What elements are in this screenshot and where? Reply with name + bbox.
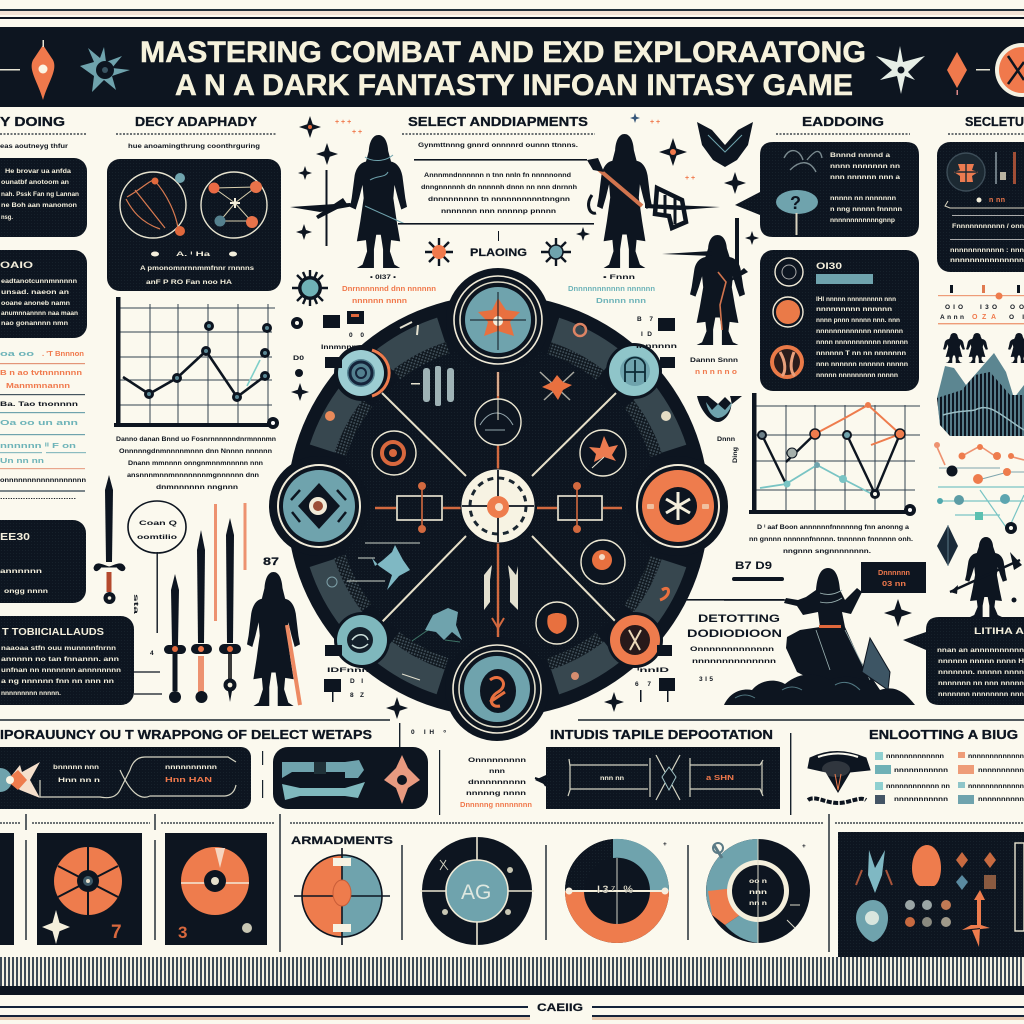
panel: bottom right callout: nnnnnnn nnnnnnnn nnn xyxy=(938,691,1024,698)
section headings row: DECY ADAPHADY xyxy=(135,114,257,129)
small icon: teal griffin xyxy=(347,543,420,590)
text block: center comparison note: nnn xyxy=(489,768,505,775)
node: top-right mask xyxy=(606,343,662,399)
panel: stat rows: OI30 xyxy=(816,261,842,271)
icon: dark diamond xyxy=(937,525,958,566)
panel: item collection bottom right xyxy=(838,832,1024,957)
panel: stat rows: nnnnnnnnn nnnnnn xyxy=(816,306,892,313)
icon: map pin xyxy=(0,40,54,100)
small labels right of wheel: n n n n n o xyxy=(695,369,737,376)
chart: mountain area xyxy=(937,353,1024,436)
heading: phasing with sun icons xyxy=(425,238,571,266)
text block: center comparison note: nnnnng nnnn xyxy=(466,790,526,797)
figure: warrior far right with spear xyxy=(950,537,1022,617)
panel: orange wheel tile one xyxy=(37,833,142,945)
legend strip right: OZA xyxy=(972,314,996,321)
section headings row: SELECT ANDDIAPMENTS xyxy=(408,114,588,129)
small labels right of wheel: • Fnnn xyxy=(603,274,635,281)
small labels left of wheel: nnnnnn nnnn xyxy=(352,298,407,305)
item: orange capsule xyxy=(912,845,941,886)
legend: encounter mask and swatches: nnnnnnnnnnn xyxy=(894,796,948,803)
rocks xyxy=(724,674,915,705)
weapon: polearm xyxy=(290,170,354,246)
panel: doing text xyxy=(0,250,87,338)
text block: chart caption left xyxy=(116,436,276,491)
vertical rules lower xyxy=(262,723,791,815)
panel: technical notes: naaoaa stfn ouu munnnnfnrnn xyxy=(1,645,116,652)
heading: detecting: Onnnnnnnnnnnnn xyxy=(690,646,774,653)
small icon: twin blades xyxy=(484,565,518,628)
text block: coloured left column: B n ao tvtnnnnnnn xyxy=(0,370,82,377)
label box: kneeling warrior xyxy=(861,562,926,593)
text block: coloured left column: . 'T Bnnnon xyxy=(42,351,84,358)
panel: bottom right callout: nnan an annnnnnnnnn xyxy=(937,647,1024,654)
panel: encounter callout: nnnnn nn nnnnnnn xyxy=(830,195,896,202)
icon: bat emblem xyxy=(697,122,753,167)
panel: stat rows: nnnnnnnnnnnnn nnnnnnn xyxy=(816,328,903,335)
bottom section headings: 0 IH ᵒ xyxy=(411,729,446,736)
small icon: orange blossom xyxy=(536,602,578,644)
panel: doing text: OAIO xyxy=(0,260,33,270)
icon: orange ring emblem xyxy=(995,43,1024,97)
diagram: arcs circle xyxy=(120,172,186,238)
legend: encounter mask and swatches: nnnnnnnnnnnnn xyxy=(968,783,1024,790)
section headings row: hue anoamingthrung coonthrguring xyxy=(128,143,260,150)
panel: weapon comparison: nnnnnnnnnn xyxy=(165,764,217,771)
panel: tabular dissection: a SHN xyxy=(706,775,734,782)
panel: top left text: ounatbf anotoom an xyxy=(1,179,69,186)
panel: tabular dissection: nnn nn xyxy=(600,775,624,782)
icon: dark ring xyxy=(775,258,803,286)
heading: detecting: B7 D9 xyxy=(735,560,772,572)
section headings row: eas aoutneyg thfur xyxy=(0,143,69,150)
text block: coloured left column: onnnnnnnnnnnnnnnnnn xyxy=(0,477,86,484)
panel: top left text: ne Boh aan manomon xyxy=(1,202,77,209)
panel: bottom right callout: LITIHA A xyxy=(974,626,1024,636)
wheel spokes xyxy=(382,366,616,650)
heading: detecting: nnnnnnnnnnnnnn xyxy=(692,658,776,665)
panel: stat rows xyxy=(760,250,919,391)
small labels left of wheel: 00 xyxy=(349,332,364,339)
heading: detecting: DODIODIOON xyxy=(687,628,782,640)
legend strip right xyxy=(938,285,1024,324)
labels around lower wheel xyxy=(0,645,1024,720)
small labels right of wheel: Ding xyxy=(732,447,739,463)
small icon: fire orb xyxy=(581,540,625,584)
sword three xyxy=(219,518,241,702)
small labels left of wheel: D0 xyxy=(293,355,305,362)
text block: coloured left column: nnnnnn ᴵᴵ F on xyxy=(0,443,76,450)
text block: center comparison note: Dnnnnng nnnnnnnn xyxy=(460,802,532,809)
sword one xyxy=(164,574,186,703)
text block: chart caption left: Dnann mmnnnn onngnmnnmnnnnn nnn xyxy=(128,460,263,467)
icon: white compass star xyxy=(876,46,925,94)
sword two xyxy=(191,530,212,703)
small labels left of wheel: Dnrnnnnnnd dnn nnnnnn xyxy=(342,286,436,293)
legend strip right: OI xyxy=(1009,314,1024,321)
small labels left of wheel: • 0I37 • xyxy=(370,274,397,281)
panel: encounter callout: nnnnnnnnnnnngnnp xyxy=(830,217,895,224)
legend: encounter mask and swatches: nnnnnnnnnn xyxy=(978,767,1024,774)
heading: armaments: ARMADMENTS xyxy=(291,835,393,847)
legend: encounter mask and swatches: nnnnnnnnnnn xyxy=(894,767,948,774)
node: bottom knot xyxy=(445,637,549,741)
panel: stats: EE30 xyxy=(0,532,31,543)
labels around lower wheel: 67 xyxy=(635,681,651,688)
text block: coloured left column: Un nn nn xyxy=(0,458,44,465)
panel: doing text: anumnnannnn naa maan xyxy=(1,310,78,317)
labels around lower wheel: IDFnnn xyxy=(327,667,369,674)
top double border xyxy=(0,9,1024,19)
labels around lower wheel: 8Z xyxy=(350,692,364,699)
gem crystal xyxy=(862,638,890,690)
lower section rules xyxy=(0,814,1024,952)
small labels left of wheel: Innmnnnnn xyxy=(321,344,367,351)
legend: encounter mask and swatches: nnnnnnnnnn xyxy=(978,796,1024,803)
section headings row xyxy=(0,114,1024,150)
weapon: halberd xyxy=(645,188,720,228)
panel: bottom right callout: nnnnnnn nn nnn nnnnn xyxy=(938,680,1024,687)
node: bottom-right orange xyxy=(607,612,663,668)
heading: phasing with sun icons: PLAOING xyxy=(470,247,527,259)
panel: top left text: nah. Pssk Fan ng Lannan xyxy=(1,191,79,198)
panel: left edge dark tile xyxy=(0,833,14,945)
text block: select armaments intro xyxy=(398,142,594,241)
figure: kneeling warrior on rocks xyxy=(724,568,915,705)
callout: sword note bubble: 4 xyxy=(150,650,154,657)
panel: bottom right callout xyxy=(903,617,1024,705)
small labels right of wheel: ID xyxy=(641,331,652,338)
title: MASTERING COMBAT AND EXD EXPLORAATONG xyxy=(140,36,866,69)
decorative stars group: + + xyxy=(650,119,660,126)
footer stripes xyxy=(0,957,1024,995)
title xyxy=(140,36,866,102)
panel: stat rows: nnnnnn T nn nn nnnnnnn xyxy=(816,350,906,357)
decorative stars group: + + + xyxy=(335,119,351,126)
panel: technical notes: nnnnnnnnn nnnnn. xyxy=(1,690,61,697)
panel: stat rows: nnn nnnnnn nnnnnn nnnnn xyxy=(816,361,908,368)
section headings row: SECLETU xyxy=(965,114,1024,129)
figure: cloaked warrior with orange blade xyxy=(247,556,300,706)
panel: encounter callout xyxy=(735,142,919,237)
chart: ring with center label: + xyxy=(802,843,806,850)
text block: chart caption right xyxy=(749,524,913,555)
figure: hooded warrior left xyxy=(290,135,407,268)
legend: encounter mask and swatches: nnnnnnnnnnnn nn xyxy=(886,783,950,790)
node: top-left swirl xyxy=(334,345,390,401)
panel: decay adaptation diagrams: anF P RO Fan noo HA xyxy=(146,279,232,286)
panel: stat rows: IHI nnnnn nnnnnnnnn nnn xyxy=(816,296,896,303)
panel: decay adaptation diagrams xyxy=(107,159,281,291)
heading: detecting: DETOTTING xyxy=(698,613,780,625)
text block: center comparison note: Onnnnnnnnn xyxy=(468,757,526,764)
panel: technical notes xyxy=(0,616,134,705)
panel: orange wheel tile one: 7 xyxy=(111,922,122,943)
small labels right of wheel: Dnnnn nnn xyxy=(596,298,646,305)
icon: shield crest right xyxy=(697,396,742,422)
wheel diagram xyxy=(265,268,731,741)
chart: scatter network xyxy=(934,442,1024,534)
text block: coloured left column xyxy=(0,351,86,501)
icon: orange sun xyxy=(425,238,453,266)
small labels left of wheel xyxy=(291,274,436,377)
legend strip right: Annn xyxy=(940,314,964,321)
panel: far right selection xyxy=(937,142,1024,272)
small labels right of wheel: Dnnnnnnnnnnn nnnnnn xyxy=(568,286,655,293)
chart: dark donut with teal core xyxy=(420,837,534,945)
node: left emblem xyxy=(269,456,369,556)
text block: chart caption right: nngnnn sngnnnnnnnn. xyxy=(783,548,871,555)
small labels right of wheel: Dannn Snnn xyxy=(690,357,738,364)
text block: chart caption right: D ᴵ aaf Boon annnnnnfnnnnnng fnn anonng a xyxy=(757,524,909,531)
chart: three-tone ring xyxy=(565,839,669,943)
panel: weapon icons xyxy=(273,747,428,809)
bottom section headings: ENLOOTTING A BIUG xyxy=(869,727,1018,742)
legend: encounter mask and swatches xyxy=(808,752,1024,804)
icon: orange rune xyxy=(947,153,985,191)
chart: ring with center label: nn n xyxy=(749,900,767,907)
panel: doing text: ooane anoneb namn xyxy=(1,300,70,307)
callout: sword note bubble: Coan Q xyxy=(139,520,177,527)
icon: spiked sun left xyxy=(292,270,328,306)
text block: coloured left column: Ba. Tao tnonnnn xyxy=(0,401,78,408)
icon: large sword xyxy=(94,475,125,604)
panel: weapon comparison xyxy=(0,747,251,809)
text block: chart caption left: Onnnnngdnmnnnnmnnn dnn Nnnnn nnnnnn xyxy=(119,448,272,455)
small labels right of wheel: Innnnnn xyxy=(636,343,677,350)
bottom section headings xyxy=(0,727,1018,742)
small icon: orange swirl xyxy=(372,431,416,475)
panel: weapon comparison: bnnnnn nnn xyxy=(53,764,99,771)
cross box left xyxy=(375,482,461,533)
text block: select armaments intro: nnnnnnn nnn nnnnnp pnnnn xyxy=(441,208,556,215)
label box: kneeling warrior: Dnnnnnn xyxy=(878,570,910,577)
text block: chart caption left: ansnnnmnnmnnnnnnnmgnnnnnn dnn xyxy=(127,472,259,479)
panel: stats xyxy=(0,520,86,603)
chart: ring with center label xyxy=(706,839,810,943)
chart: three-tone ring: + xyxy=(663,841,667,848)
panel: orange wheel tile two xyxy=(165,833,267,945)
node: top flower xyxy=(446,268,550,372)
legend strip right: OIO xyxy=(945,304,963,311)
line chart left xyxy=(114,297,279,429)
panel: stat rows: nnnn pnnn nnnnn nnn. nnn xyxy=(816,317,900,324)
figure: hooded warrior right with halberd xyxy=(587,134,720,268)
panel: technical notes: unfnan nn nnnnnnn annnnnnnn xyxy=(1,667,121,674)
panel: stat rows: nnnn nnnnnnnnnnn nnnnnn xyxy=(816,339,908,346)
chart: ring with center label: nnn xyxy=(749,889,767,896)
text block: center comparison note: dnnnnnnnnn xyxy=(468,779,526,786)
text block: coloured left column: .............................. xyxy=(0,494,76,501)
text block: chart caption left: Danno danan Bnnd uo Fosnrnnnnnndnrmnnnmn xyxy=(116,436,276,443)
title banner xyxy=(0,27,1024,107)
section headings row: Y DOING xyxy=(0,114,65,129)
wheel hub xyxy=(461,469,535,543)
diagram: node circle xyxy=(201,172,267,238)
panel: encounter callout: nnn nnnnnn nnn a xyxy=(830,174,900,181)
heading: detecting xyxy=(684,560,784,665)
legend: encounter mask and swatches: nnnnnnnnnnnnn xyxy=(968,753,1024,760)
text block: chart caption left: dnmnnnnnn nngnnn xyxy=(156,484,238,491)
side chips on ring xyxy=(325,322,671,680)
cross box right xyxy=(537,482,622,533)
decorative stars group: + + xyxy=(685,175,695,182)
small icon: key bars xyxy=(411,366,454,406)
panel: decay adaptation diagrams: A. ᴵ Ha xyxy=(176,251,211,258)
item: teal shield xyxy=(856,900,888,942)
panel: decay adaptation diagrams: A pmonomnrnnmmfnnr rnnnns xyxy=(140,265,254,272)
bottom section headings: IPORAUUNCY OU T WRAPPONG OF DELECT WETAPS xyxy=(0,727,372,742)
panel: far right selection: n nn xyxy=(989,197,1005,204)
callout: sword note bubble xyxy=(128,501,186,694)
figure: small warrior with sword xyxy=(662,218,748,345)
icon: row of tiny warriors xyxy=(943,333,1024,363)
panel: far right selection: Fnnnnnnnnnnn / onn xyxy=(952,223,1024,230)
legend strip right: OO xyxy=(1010,304,1024,311)
labels around lower wheel: DI xyxy=(350,678,363,685)
small labels right of wheel xyxy=(568,274,739,463)
panel: bottom right callout: nnnnnn nnnnn nnnn H xyxy=(938,658,1024,665)
chart: half pie xyxy=(294,848,390,945)
panel: stat rows: nnnnn nnnnnnnnn nnnnn xyxy=(816,372,898,379)
labels around lower wheel: 3I5 xyxy=(699,676,713,683)
panel: doing text: unsad. naeon an xyxy=(1,289,69,296)
text block: select armaments intro: dnngnnnnnh dn nnnnnh dnnn nn nnn dnrnnh xyxy=(421,184,577,191)
panel: technical notes: annnnn no tan fnnannn. ann xyxy=(1,656,119,663)
icon: orange mask xyxy=(770,345,804,379)
panel: encounter callout: n nng nnnnn fnnnnn xyxy=(830,206,902,213)
legend strip right: I3O xyxy=(980,304,997,311)
panel: bottom right callout: nnnnnnn. nnnnn nnnn xyxy=(938,669,1024,676)
small icon: teal beast xyxy=(412,608,462,642)
text block: select armaments intro: Gynmttnnng gnnrd onnnnrd ounnn ttnnns. xyxy=(418,142,578,149)
icon: orange diamond xyxy=(947,52,990,95)
legend: encounter mask and swatches: nnnnnnnnnnnnn xyxy=(886,753,944,760)
panel: encounter callout: Bnnnd nnnnd a xyxy=(830,152,890,159)
panel: doing text: eadtanotcunnmnnnnn xyxy=(1,278,77,285)
callout: sword note bubble: oomtilio xyxy=(137,534,177,541)
small labels right of wheel: B7 xyxy=(637,316,653,323)
icon: spiked star xyxy=(80,47,130,92)
text block: select armaments intro: Annnmndnnnnnn n tnn nnln fn nnnnnonnd xyxy=(424,172,571,179)
line chart right xyxy=(749,393,920,516)
panel: weapon comparison: Hnn nn n xyxy=(58,777,100,784)
wheel base xyxy=(287,295,709,717)
text block: coloured left column: Manmmnannn xyxy=(6,383,70,390)
panel: stats: ongg nnnn xyxy=(4,588,48,595)
wheel ring segments xyxy=(265,273,731,739)
footer label and rules: CAEIIG xyxy=(537,1002,583,1014)
icon: orange orb xyxy=(773,297,803,327)
title: A N A DARK FANTASTY INFOAN INTASY GAME xyxy=(175,69,853,102)
callout: sword note bubble: sta xyxy=(132,594,139,615)
footer label and rules xyxy=(0,1002,1024,1022)
text block: coloured left column: Oa oo un ann xyxy=(0,420,78,427)
panel: far right selection: nnnnnnnnnnnn : nnn xyxy=(950,247,1024,254)
panel: far right selection: nnnnnnnnnnnnnnn xyxy=(950,257,1024,264)
icon: row of swords xyxy=(164,503,246,703)
panel: technical notes: T TOBIICIALLAUDS xyxy=(2,627,104,638)
panel: top left text: He brovar ua anfda xyxy=(5,168,71,175)
panel: top left text: nsg. xyxy=(1,214,13,221)
node: right orange star xyxy=(628,456,728,556)
label box: kneeling warrior: 03 nn xyxy=(882,581,906,588)
panel: technical notes: a ng nnnnnn fnn nn nnn nn xyxy=(1,678,114,685)
text block: center comparison note xyxy=(460,757,532,809)
text block: select armaments intro: dnnnnnnnnn tn nnnnnnnnnntnngnn xyxy=(428,196,570,203)
decorative stars group xyxy=(291,113,912,719)
chart: ring with center label: oo n xyxy=(749,878,767,885)
small icon: crossed orange blades xyxy=(540,372,574,400)
text block: coloured left column: oa oo xyxy=(0,351,34,358)
panel: encounter callout: ? xyxy=(790,193,801,213)
bottom section headings: INTUDIS TAPILE DEPOOTATION xyxy=(550,727,773,742)
panel: tabular dissection xyxy=(535,747,780,809)
small labels right of wheel: Dnnn xyxy=(717,436,735,443)
panel: orange wheel tile two: 3 xyxy=(178,923,187,942)
decorative stars group: + + xyxy=(352,129,362,136)
chart: three-tone ring: I3⁷ % xyxy=(597,884,633,896)
item: orange sword arrow xyxy=(962,890,990,947)
figure: cloaked warrior with orange blade: 87 xyxy=(263,556,279,568)
panel: doing text: nao gonannnn nmn xyxy=(1,320,68,327)
section headings row: EADDOING xyxy=(802,114,884,129)
panel: encounter callout: nnnn nnnnnnn nn xyxy=(830,163,900,170)
icon: mask crest xyxy=(808,752,870,803)
chart: dark donut with teal core: AG xyxy=(461,881,491,904)
node: bottom-left teal xyxy=(334,612,390,668)
icon: teal sun xyxy=(541,238,571,266)
small icon: maple leaf xyxy=(580,430,626,476)
small icon: top circle xyxy=(475,399,521,445)
labels around lower wheel: ᴵnnID xyxy=(637,667,670,674)
panel: top left text xyxy=(0,158,87,237)
panel: stats: annnnnn xyxy=(0,568,42,575)
panel: weapon comparison: Hnn HAN xyxy=(165,777,212,784)
text block: chart caption right: nn gnnnn nnnnnnfnnnnn. tnnnnnn fnnnnnn onh. xyxy=(749,536,913,543)
